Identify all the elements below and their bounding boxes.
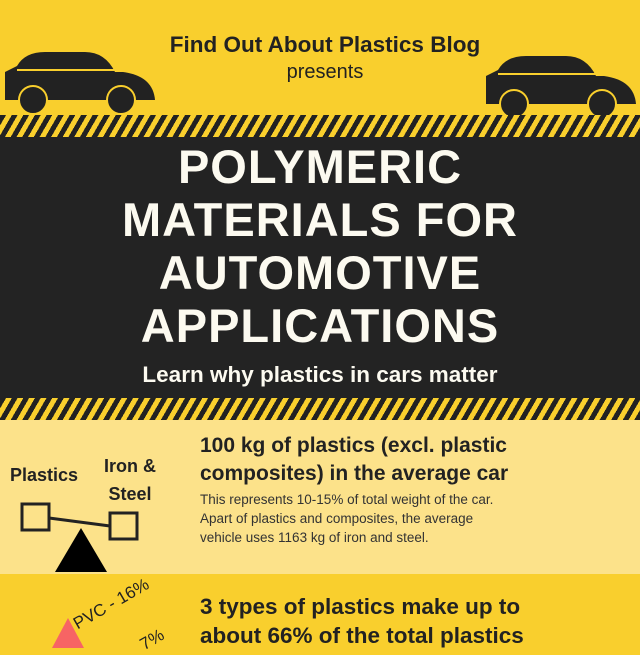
seesaw icon: Steel: [108, 484, 152, 504]
panel: three plastics: PVC - 16%: [70, 575, 152, 633]
panel: weight: [0, 420, 640, 574]
header text: presents: [287, 61, 363, 83]
icon: right car: [486, 56, 636, 115]
panel: three plastics: 7%: [137, 625, 167, 654]
header text: [170, 32, 480, 83]
heading: [200, 434, 508, 485]
title band: [0, 137, 640, 398]
heading: 3 types of plastics make up to: [200, 594, 520, 619]
title: POLYMERIC: [178, 140, 462, 193]
heading: 100 kg of plastics (excl. plastic: [200, 434, 507, 457]
text block: vehicle uses 1163 kg of iron and steel.: [200, 530, 429, 545]
seesaw icon: [10, 456, 156, 572]
seesaw icon: Plastics: [10, 465, 78, 485]
heading: [200, 594, 524, 648]
text block: This represents 10-15% of total weight of the car.: [200, 492, 493, 507]
pie/triangle chart: [52, 618, 84, 648]
seesaw icon: Iron &: [104, 456, 156, 476]
text block: Apart of plastics and composites, the average: [200, 511, 473, 526]
subtitle: Learn why plastics in cars matter: [142, 362, 498, 387]
text block: [200, 492, 493, 545]
header text: Find Out About Plastics Blog: [170, 32, 480, 57]
icon: left car: [5, 52, 155, 113]
heading: composites) in the average car: [200, 462, 508, 485]
title: [122, 140, 518, 352]
panel: three plastics: [52, 575, 524, 654]
title: AUTOMOTIVE: [159, 246, 481, 299]
title: MATERIALS FOR: [122, 193, 518, 246]
heading: about 66% of the total plastics: [200, 623, 524, 648]
title: APPLICATIONS: [141, 299, 499, 352]
